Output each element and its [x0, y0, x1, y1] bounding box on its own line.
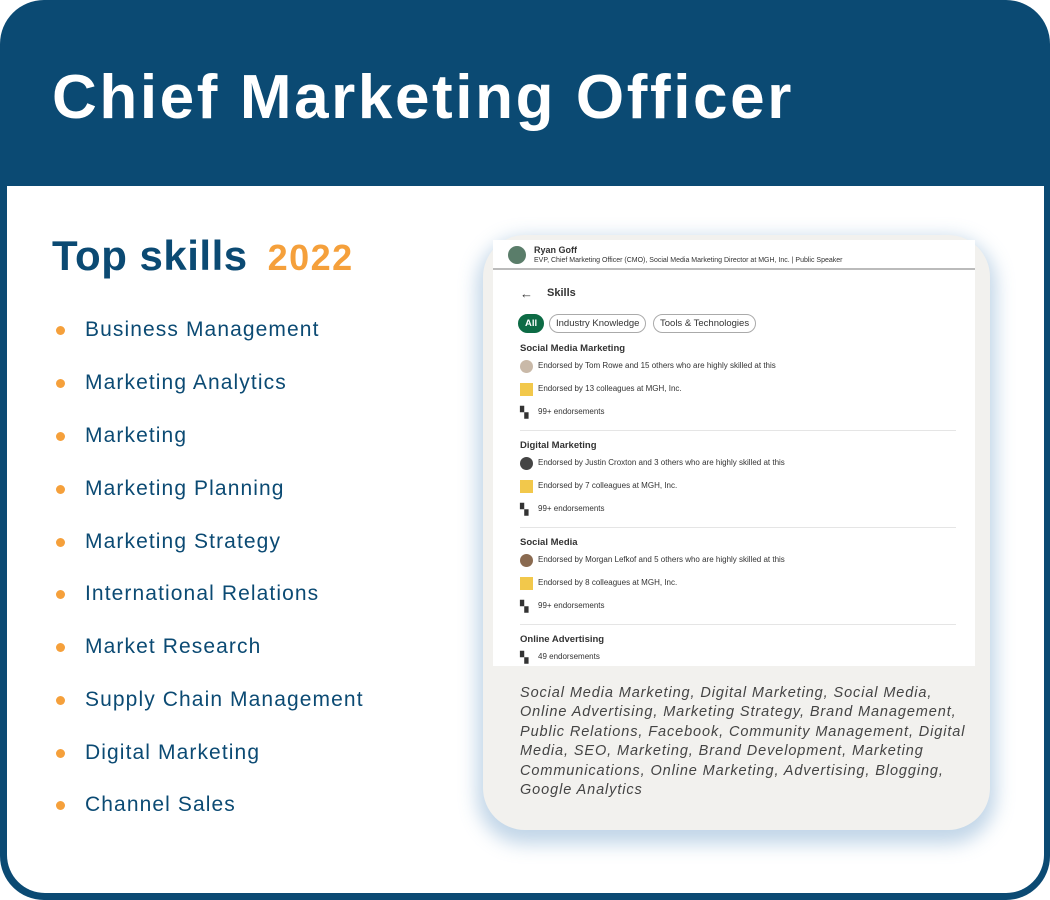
skill: social media: Social Media	[520, 537, 578, 548]
screenshot: 49 endorsements	[538, 652, 600, 661]
title: Chief Marketing Officer	[52, 63, 794, 132]
text: Marketing Strategy	[85, 530, 281, 553]
skill: digital marketing: Digital Marketing	[520, 440, 597, 451]
profile header: EVP, Chief Marketing Officer (CMO), Social Media Marketing Director at MGH, Inc. | Public Speaker	[534, 257, 842, 264]
text: International Relations	[85, 582, 319, 605]
screenshot: 99+ endorsements	[538, 504, 604, 513]
text: Market Research	[85, 635, 261, 658]
filter pills	[518, 314, 544, 333]
screenshot: Endorsed by 8 colleagues at MGH, Inc.	[538, 578, 677, 587]
screenshot: Skills	[547, 287, 576, 299]
screenshot: Endorsed by Tom Rowe and 15 others who are highly skilled at this	[538, 361, 776, 370]
text: Marketing Analytics	[85, 371, 287, 394]
panel: profile screenshot card	[483, 235, 990, 830]
screenshot: Endorsed by Justin Croxton and 3 others who are highly skilled at this	[538, 458, 785, 467]
text: Channel Sales	[85, 793, 236, 816]
skills heading: ←	[520, 286, 533, 301]
text: Business Management	[85, 318, 320, 341]
screenshot: ▚	[520, 407, 528, 419]
screenshot: Endorsed by 7 colleagues at MGH, Inc.	[538, 481, 677, 490]
screenshot: ▚	[520, 601, 528, 613]
skills list	[56, 318, 364, 816]
filter pills: All	[525, 318, 537, 329]
heading: top skills 2022: Top skills 2022	[52, 232, 354, 279]
screenshot: Tools & Technologies	[660, 318, 749, 329]
text: Supply Chain Management	[85, 688, 364, 711]
text: Digital Marketing	[85, 741, 260, 764]
screenshot: Endorsed by 13 colleagues at MGH, Inc.	[538, 384, 682, 393]
text: Marketing Planning	[85, 477, 285, 500]
screenshot: 99+ endorsements	[538, 601, 604, 610]
skill: online advertising: Online Advertising	[520, 634, 604, 645]
screenshot: ▚	[520, 504, 528, 516]
profile header	[493, 240, 975, 270]
icon: avatar	[508, 246, 526, 264]
screenshot: ▚	[520, 652, 528, 664]
screenshot: Industry Knowledge	[556, 318, 639, 329]
text: Marketing	[85, 424, 187, 447]
screenshot: 99+ endorsements	[538, 407, 604, 416]
body panel	[7, 186, 1044, 893]
profile header: Ryan Goff	[534, 245, 577, 255]
screenshot: Endorsed by Morgan Lefkof and 5 others who are highly skilled at this	[538, 555, 785, 564]
skill: social media marketing: Social Media Marketing	[520, 343, 625, 354]
screenshot	[493, 240, 975, 666]
text: listed skills: Social Media Marketing, Digital Marketing, Social Media, Online Advertising, Marketing Strategy, Brand Management, Public Relations, Facebook, Community Management, Digital Media, SEO, Marketing, Brand Development, Marketing Communications, Online Marketing, Advertising, Blogging, Google Analytics	[520, 685, 965, 798]
